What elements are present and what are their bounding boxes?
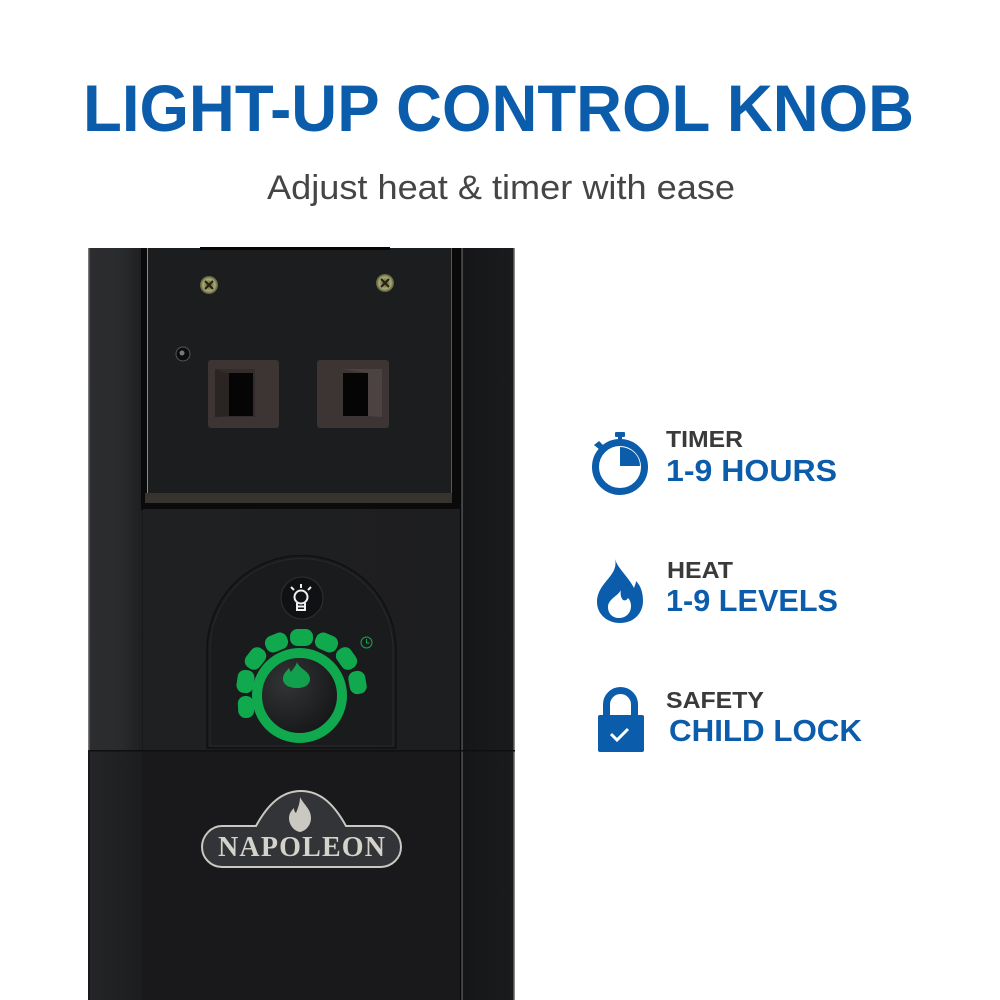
title: LIGHT-UP CONTROL KNOB xyxy=(83,71,914,145)
Napoleon badge: NAPOLEON xyxy=(218,832,385,863)
icon: stopwatch xyxy=(594,432,644,492)
lower panel xyxy=(146,752,460,1000)
ledge xyxy=(145,493,452,503)
icon: padlock xyxy=(598,690,644,752)
light button xyxy=(281,577,323,619)
Napoleon badge xyxy=(202,791,401,867)
feature: heat xyxy=(597,557,838,623)
arch control surround xyxy=(207,556,396,748)
heat label: HEAT xyxy=(667,557,734,583)
safety label: SAFETY xyxy=(666,687,764,713)
LED level segments xyxy=(235,629,368,718)
control knob xyxy=(257,653,342,738)
icon: flame xyxy=(597,559,643,623)
timer label: TIMER xyxy=(666,426,743,452)
control panel xyxy=(143,509,460,750)
timer indicator xyxy=(361,637,372,648)
product photo: heater column xyxy=(88,247,515,1000)
subtitle: Adjust heat & timer with ease xyxy=(267,169,735,207)
screws xyxy=(176,274,394,361)
right handle xyxy=(317,360,389,428)
heat value: 1-9 LEVELS xyxy=(666,583,838,618)
timer value: 1-9 HOURS xyxy=(666,453,837,488)
upper panel xyxy=(145,247,452,503)
safety value: CHILD LOCK xyxy=(669,713,863,748)
feature: safety xyxy=(598,687,863,752)
left handle xyxy=(208,360,279,428)
flame on knob xyxy=(283,662,310,688)
feature: timer xyxy=(594,426,837,492)
badge flame xyxy=(289,797,311,832)
